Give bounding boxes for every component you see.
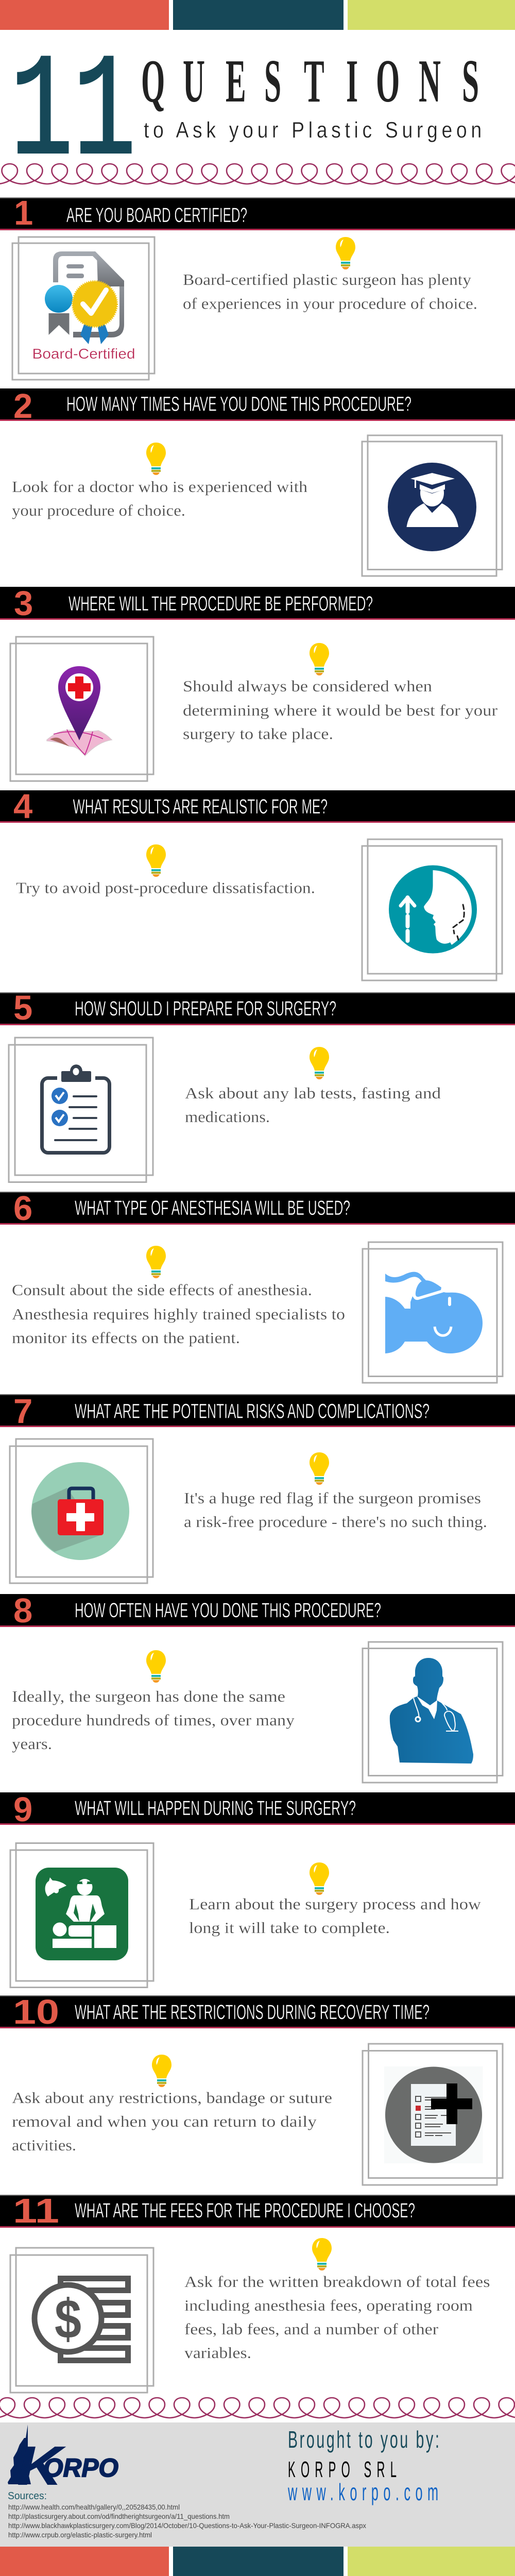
heading bar 11 [0, 2192, 515, 2230]
text block 6: monitor its effects on the patient. [12, 1329, 240, 1347]
icon: light bulb 4 [146, 844, 166, 877]
icon: light bulb 11 [312, 2238, 332, 2270]
Korpo logo [8, 2425, 118, 2497]
text block 10 [12, 2089, 332, 2154]
icon: light bulb 3 [310, 643, 329, 675]
text block 4: Try to avoid post-procedure dissatisfaction. [16, 879, 315, 896]
section 10: recovery [0, 1993, 515, 2185]
heading bar 8: 8 [13, 1591, 32, 1630]
icon: light bulb 1 [336, 237, 355, 269]
brought to you by: Brought to you by: [288, 2427, 439, 2453]
icon: light bulb 9 [310, 1862, 329, 1895]
icon: board certificate: Board-Certified [32, 346, 135, 362]
image frame 10 [363, 2044, 503, 2185]
heading bar 5: HOW SHOULD I PREPARE FOR SURGERY? [75, 997, 336, 1020]
text block 7: a risk-free procedure - there's no such thing. [184, 1513, 487, 1531]
title numeral 11 [10, 31, 136, 196]
title [10, 31, 482, 196]
icon: light bulb 8 [146, 1650, 166, 1683]
icon: graduate [388, 463, 476, 551]
sources list: http://www.blackhawkplasticsurgery.com/Blog/2014/October/10-Questions-to-Ask-Your-Plastic-Surgeon-INFOGRA.aspx [8, 2521, 366, 2530]
heading bar 9 [0, 1790, 515, 1829]
squiggle divider top [0, 163, 515, 185]
icon: map pin with cross [47, 666, 112, 756]
text block 8: Ideally, the surgeon has done the same [12, 1687, 285, 1705]
image frame 4 [362, 839, 502, 980]
heading bar 8 [0, 1591, 515, 1630]
sources list: Sources: [8, 2490, 47, 2502]
image frame 11 [10, 2248, 153, 2393]
icon: first-aid kit [31, 1462, 129, 1560]
heading bar 6: WHAT TYPE OF ANESTHESIA WILL BE USED? [75, 1197, 350, 1219]
heading bar 7 [0, 1392, 515, 1431]
text block 8 [12, 1687, 295, 1753]
text block 5 [185, 1084, 441, 1126]
text block 10: activities. [12, 2136, 76, 2154]
title numeral 11: 1 [10, 31, 73, 196]
icon: face profile [389, 866, 477, 953]
text block 3 [183, 677, 498, 743]
heading bar 1: ARE YOU BOARD CERTIFIED? [66, 204, 247, 227]
heading bar 10 [0, 1993, 515, 2031]
heading bar 4: 4 [13, 787, 32, 826]
text block 6: Anesthesia requires highly trained specialists to [12, 1305, 345, 1323]
text block 1 [183, 270, 477, 312]
Korpo logo: ORPO [43, 2453, 118, 2482]
sources list [8, 2490, 366, 2539]
text block 9: long it will take to complete. [189, 1919, 390, 1937]
icon: clipboard checklist [42, 1064, 109, 1153]
heading bar 6 [0, 1189, 515, 1228]
section 1: board certified [0, 194, 515, 380]
image frame 7 [10, 1439, 153, 1583]
text block 7: It's a huge red flag if the surgeon promises [184, 1489, 481, 1507]
section 4: realistic results [0, 787, 515, 980]
text block 11: Ask for the written breakdown of total fees [184, 2273, 490, 2291]
icon: light bulb 2 [146, 443, 166, 475]
squiggle divider bottom [0, 2397, 515, 2419]
text block 6 [12, 1281, 345, 1347]
heading bar 11: 11 [13, 2192, 59, 2230]
icon: money stack with dollar coin: $ [55, 2287, 81, 2350]
text block 8: years. [12, 1735, 52, 1753]
image frame 5 [9, 1038, 153, 1182]
heading bar 2 [0, 387, 515, 426]
icon: medical checklist [384, 2066, 483, 2163]
heading bar 4: WHAT RESULTS ARE REALISTIC FOR ME? [73, 795, 328, 818]
icon: board certificate [32, 251, 135, 362]
text block 9: Learn about the surgery process and how [189, 1895, 482, 1913]
heading bar 5: 5 [13, 989, 32, 1027]
sources list: http://www.crpub.org/elastic-plastic-surgery.html [8, 2531, 152, 2539]
icon: surgery pictogram [36, 1868, 128, 1960]
text block 1: of experiences in your procedure of choice. [183, 295, 477, 312]
text block 9 [189, 1895, 482, 1937]
heading bar 1 [0, 194, 515, 232]
image frame 8 [363, 1642, 503, 1783]
brought to you by: KORPO SRL [288, 2458, 397, 2482]
icon: doctor silhouette [390, 1658, 473, 1764]
section 7: risks [0, 1392, 515, 1583]
heading bar 3 [0, 584, 515, 623]
image frame 9 [10, 1843, 153, 1988]
text block 5: Ask about any lab tests, fasting and [185, 1084, 441, 1102]
heading bar 7: 7 [13, 1392, 32, 1431]
heading bar 2: 2 [13, 387, 32, 426]
text block 11: fees, lab fees, and a number of other [184, 2320, 439, 2338]
text block 2: your procedure of choice. [12, 501, 185, 519]
section 5: prepare [0, 989, 515, 1182]
text block 3: determining where it would be best for your [183, 701, 498, 719]
title numeral 11: 1 [73, 31, 136, 196]
image frame 6 [363, 1242, 503, 1383]
text block 6: Consult about the side effects of anesthesia. [12, 1281, 312, 1299]
icon: light bulb 10 [152, 2055, 171, 2087]
text block 7 [184, 1489, 487, 1531]
icon: light bulb 6 [146, 1246, 166, 1278]
title word QUESTIONS: QUESTIONS [141, 47, 479, 115]
text block 10: removal and when you can return to daily [12, 2112, 317, 2130]
icon: money stack with dollar coin [35, 2278, 128, 2361]
heading bar 1: 1 [14, 194, 33, 232]
text block 2: Look for a doctor who is experienced with [12, 478, 308, 496]
section 6: anesthesia [0, 1189, 515, 1383]
sources list: http://www.health.com/health/gallery/0,,20528435,00.html [8, 2503, 180, 2511]
section 2: how many times [0, 387, 515, 576]
icon: patient with anesthesia mask [385, 1272, 483, 1353]
brought to you by [287, 2427, 439, 2505]
text block 2 [12, 478, 308, 519]
section 9: during surgery [0, 1790, 515, 1988]
sources list: http://plasticsurgery.about.com/od/findtherightsurgeon/a/11_questions.htm [8, 2512, 230, 2520]
heading bar 5 [0, 989, 515, 1027]
text block 3: surgery to take place. [183, 724, 333, 743]
text block 11 [184, 2273, 490, 2362]
subtitle: to Ask your Plastic Surgeon [144, 117, 482, 143]
section 11: fees [0, 2192, 515, 2393]
section 3: where performed [0, 584, 515, 781]
heading bar 3: 3 [14, 584, 33, 623]
Korpo logo: K [17, 2434, 66, 2497]
text block 10: Ask about any restrictions, bandage or suture [12, 2089, 332, 2107]
heading bar 6: 6 [13, 1189, 32, 1228]
heading bar 10: 10 [13, 1993, 59, 2031]
heading bar 9: 9 [13, 1790, 32, 1829]
icon: light bulb 5 [310, 1047, 329, 1079]
text block 8: procedure hundreds of times, over many [12, 1711, 295, 1729]
icon: light bulb 7 [310, 1452, 329, 1485]
image frame 3 [10, 637, 153, 781]
image frame 1 [12, 237, 154, 380]
text block 11: variables. [184, 2344, 251, 2362]
section 8: how often [0, 1591, 515, 1783]
top colour band [0, 0, 515, 30]
image frame 2 [362, 435, 502, 576]
text block 5: medications. [185, 1108, 270, 1126]
brought to you by: www.korpo.com [287, 2479, 438, 2505]
text block 3: Should always be considered when [183, 677, 433, 695]
text block 11: including anesthesia fees, operating room [184, 2296, 473, 2314]
bottom colour band [0, 2547, 515, 2576]
heading bar 4 [0, 787, 515, 826]
text block 1: Board-certified plastic surgeon has plenty [183, 270, 472, 289]
footer panel [0, 2422, 515, 2547]
